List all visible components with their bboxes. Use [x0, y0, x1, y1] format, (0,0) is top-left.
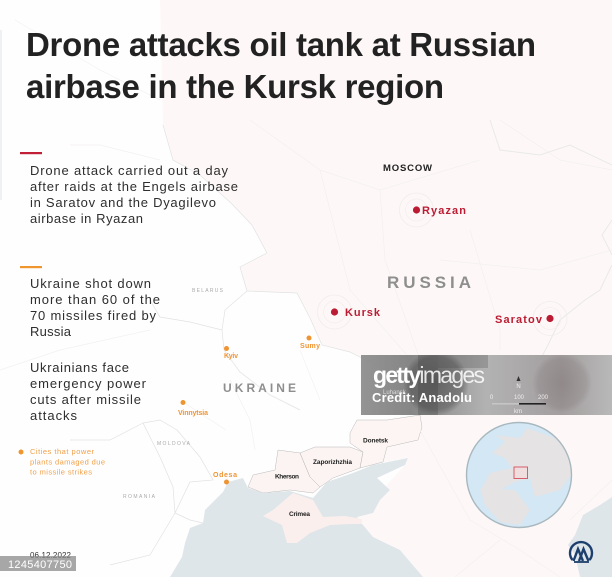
text block: drone attack: [20, 152, 238, 226]
AA logo: [570, 542, 592, 562]
rivers: [224, 120, 612, 410]
country labels: RUSSIA: [387, 273, 471, 292]
Zaporizhzhia region: [300, 447, 363, 487]
damaged cities: Kyiv: [224, 353, 238, 360]
text block: missiles: more than 60 of the: [30, 292, 160, 307]
Caspian Sea: [568, 497, 612, 577]
country labels: MOLDOVA: [157, 441, 191, 447]
occupied region labels: Donetsk: [363, 438, 388, 444]
text block: power cuts: attacks: [30, 408, 78, 423]
legend: to missile strikes: [30, 468, 92, 476]
text block: power cuts: cuts after missile: [30, 392, 141, 407]
title: [26, 26, 536, 105]
locator square: [514, 467, 528, 478]
damaged cities: Sumy: [300, 343, 320, 350]
text block: missiles: Ukraine shot down: [30, 276, 151, 291]
text block: power cuts: [30, 360, 147, 423]
occupied region labels: Crimea: [289, 511, 310, 518]
getty watermark: Credit: Anadolu: [372, 390, 472, 405]
target: Ryazan: Ryazan: [422, 205, 466, 217]
scale bar: 100: [514, 395, 525, 401]
title: airbase in the Kursk region: [26, 68, 444, 105]
image id: 1245407750: [8, 559, 72, 571]
Baltic edge: [0, 30, 2, 200]
borders: [70, 125, 420, 565]
scale bar: [490, 376, 549, 415]
target: Kursk: Kursk: [345, 307, 381, 319]
text block: drone attack: after raids at the Engels airbase: [30, 179, 238, 194]
image id: [0, 556, 76, 571]
Donetsk region: [350, 415, 422, 468]
scale bar: 0: [490, 395, 494, 401]
Russia territory: [160, 0, 612, 577]
country labels: UKRAINE: [223, 381, 296, 395]
text block: drone attack: Drone attack carried out a day: [30, 163, 228, 178]
occupied region labels: Zaporizhzhia: [313, 459, 352, 466]
text block: missiles: Russia: [30, 324, 72, 339]
legend: Cities that power: [30, 447, 94, 456]
scale bar: N: [516, 384, 521, 390]
getty watermark: gettyimages: [373, 362, 485, 388]
damaged cities: Odesa: [213, 472, 237, 479]
occupied region labels: Kherson: [275, 474, 299, 480]
Kherson region: [248, 450, 320, 493]
scale bar: km: [514, 409, 522, 415]
text block: missiles: [20, 266, 160, 339]
text block: power cuts: Ukrainians face: [30, 360, 129, 375]
legend: plants damaged due: [30, 458, 105, 466]
Crimea: [263, 493, 362, 543]
target: Saratov: [495, 302, 567, 336]
target: Kursk: [318, 295, 381, 329]
target: Ryazan: [400, 193, 466, 227]
text block: drone attack: in Saratov and the Dyagilevo: [30, 195, 216, 210]
text block: missiles: 70 missiles fired by: [30, 308, 156, 323]
scale bar: 200: [538, 395, 549, 401]
date: 06.12.2022: [30, 551, 72, 560]
Black Sea: [170, 458, 423, 577]
label: Moscow: MOSCOW: [383, 163, 432, 174]
getty watermark: [361, 350, 612, 416]
legend: [18, 447, 105, 476]
target: Saratov: Saratov: [495, 314, 543, 326]
damaged cities: [178, 336, 320, 484]
country labels: BELARUS: [192, 288, 224, 294]
damaged cities: Vinnytsia: [178, 410, 208, 417]
country labels: ROMANIA: [123, 494, 156, 500]
globe locator: [466, 422, 575, 528]
getty watermark: Luhansk: [383, 390, 407, 396]
title: Drone attacks oil tank at Russian: [26, 26, 536, 63]
text block: power cuts: emergency power: [30, 376, 147, 391]
country labels: [123, 273, 471, 500]
text block: drone attack: airbase in Ryazan: [30, 211, 143, 226]
occupied region labels: [275, 438, 388, 518]
